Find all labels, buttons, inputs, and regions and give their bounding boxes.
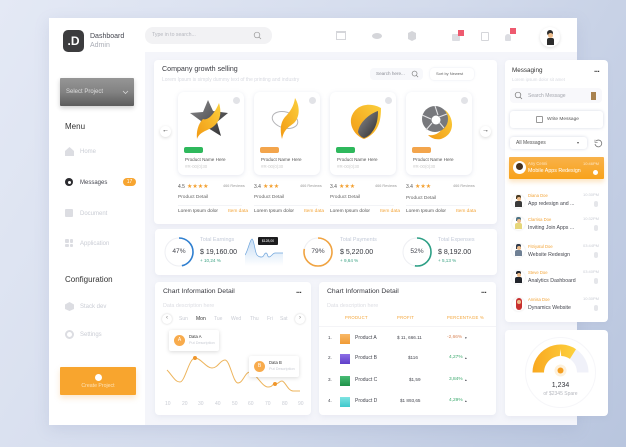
- product 4 details: Item data: [456, 209, 476, 214]
- panel: product table: [319, 282, 496, 415]
- callout: data A: Put Description: [189, 341, 215, 345]
- row D: 4,29%: [449, 398, 463, 403]
- message 5: 10:30PM: [583, 296, 599, 301]
- product 4 details: 466 Reviews: [453, 184, 475, 188]
- day selector: Thu: [250, 316, 259, 322]
- expenses donut: [402, 237, 432, 267]
- icon: shield with flame: [350, 104, 381, 139]
- select project button: Select Project: [66, 89, 103, 95]
- subheading: Data description here: [327, 303, 378, 309]
- menu item: home: [65, 147, 96, 156]
- product 2 details: ★★★: [263, 184, 279, 190]
- subheading: Data description here: [163, 303, 214, 309]
- message 3: Website Redesign: [528, 252, 570, 258]
- message 5: Annisa Doe: [528, 297, 550, 302]
- product card 1: Product Name Here: [185, 156, 226, 162]
- heading: Messaging: [512, 67, 542, 74]
- message 4: Analytics Dashboard: [528, 278, 576, 284]
- total expenses: [438, 237, 475, 263]
- logo: .D: [68, 34, 80, 48]
- axis labels: 70: [265, 401, 271, 407]
- user avatar: [540, 27, 560, 47]
- product 4 details: [406, 184, 476, 214]
- callout: data A: Data A: [189, 334, 202, 339]
- product 3 details: 3.4: [330, 184, 337, 190]
- message 4: 03:40PM: [583, 269, 599, 274]
- arrow left: ←: [162, 127, 169, 134]
- table header: PERCENTAGE %: [447, 315, 484, 320]
- message 2: Inviting Join Apps ...: [528, 224, 574, 230]
- write message button: [510, 111, 603, 128]
- earnings percent: 47%: [172, 248, 186, 255]
- message 3: 03:44PM: [583, 243, 599, 248]
- create project button: Create Project: [81, 383, 115, 389]
- product 4 details: Product Detail: [406, 196, 436, 201]
- total earnings: Total Earnings: [200, 237, 234, 243]
- row B: 4,27%: [449, 355, 463, 360]
- product 4 details: ★★★: [415, 184, 431, 190]
- callout: data B: B: [258, 363, 261, 369]
- table header: PRODUCT: [345, 315, 368, 320]
- subheading: Lorem ipsum dolor sit amet: [512, 77, 565, 82]
- heading: Company growth selling: [162, 65, 238, 73]
- row A: 1.: [328, 335, 332, 340]
- product card 4: #R-00(0)30: [413, 164, 435, 169]
- expenses percent: 52%: [410, 248, 424, 255]
- earnings tooltip: $128,00: [262, 239, 274, 243]
- message 3: [512, 243, 599, 258]
- product 4 details: Lorem Ipsum dolor: [406, 209, 446, 214]
- product 4 details: 3.4: [406, 184, 413, 190]
- logo: [63, 30, 84, 52]
- row C: ▴: [465, 378, 467, 382]
- total expenses: $ 8,192.00: [438, 248, 471, 256]
- product 2 details: Product Detail: [254, 195, 284, 200]
- day selector: Wed: [231, 316, 241, 322]
- row B: ▴: [465, 356, 467, 360]
- earnings tooltip: [258, 237, 278, 245]
- message 2: [512, 216, 599, 231]
- line chart: [166, 356, 300, 392]
- menu item: stack dev: Stack dev: [80, 304, 106, 310]
- panel: stats: [155, 229, 497, 275]
- sort by newest: [430, 68, 474, 80]
- day selector: Tue: [214, 316, 222, 322]
- product 3 details: ★★★: [339, 184, 355, 190]
- active message: [509, 157, 604, 179]
- icon: layers: [408, 31, 416, 41]
- brand text: [90, 32, 124, 49]
- search bar: [145, 27, 272, 44]
- total expenses: Total Expenses: [438, 237, 475, 243]
- axis labels: 20: [182, 401, 188, 407]
- message 5: [512, 296, 599, 312]
- axis labels: 10: [165, 401, 171, 407]
- total earnings: [200, 237, 237, 263]
- product 1 details: ★★★★: [187, 184, 209, 190]
- panel: messaging: [505, 60, 608, 322]
- gauge caption: of $2345 Spare: [543, 390, 578, 396]
- axis labels: [165, 401, 304, 407]
- product card 2: [254, 92, 320, 175]
- menu item: messages: Messages: [80, 180, 107, 186]
- product 2 details: Item data: [304, 209, 324, 214]
- active message: Mobile Apps Redesign: [528, 168, 581, 174]
- row C: [328, 376, 467, 386]
- menu heading: Menu: [65, 122, 85, 131]
- product 1 details: Lorem Ipsum dolor: [178, 209, 218, 214]
- product 1 details: 4.5: [178, 184, 185, 190]
- row B: 2.: [328, 355, 332, 360]
- earnings donut: [164, 237, 194, 266]
- menu dots: ...: [481, 286, 486, 295]
- table header: PROFIT: [397, 315, 414, 320]
- day selector: [161, 313, 306, 325]
- row D: $1 893,65: [400, 398, 420, 403]
- product 1 details: Item data: [228, 209, 248, 214]
- message 4: Steve Doe: [528, 270, 548, 275]
- subheading: Lorem Ipsum is simply dummy text of the printing and industry: [162, 77, 299, 83]
- menu dots: ...: [594, 65, 599, 74]
- row D: Product D: [355, 398, 377, 404]
- row A: ▾: [465, 336, 467, 340]
- day selector: Sun: [179, 316, 188, 322]
- total payments: Total Payments: [340, 237, 377, 243]
- select project button: [60, 78, 134, 106]
- search message: [510, 88, 602, 103]
- create project button: [60, 367, 136, 395]
- row C: 3,84%: [449, 377, 463, 382]
- callout: data A: [169, 330, 219, 351]
- message 4: [512, 269, 599, 284]
- top bar icons: [336, 28, 516, 41]
- product card 3: Product Name Here: [337, 156, 378, 162]
- product 2 details: Lorem Ipsum dolor: [254, 209, 294, 214]
- row C: 3.: [328, 377, 332, 382]
- menu item: application: Application: [80, 240, 109, 246]
- all messages dropdown: ▾: [577, 140, 579, 145]
- product 2 details: 466 Reviews: [300, 184, 322, 188]
- row B: [328, 354, 467, 364]
- menu item: messages: [65, 178, 136, 186]
- icon: feather with ring: [272, 98, 299, 139]
- message 2: Clarrisa Doe: [528, 217, 551, 222]
- search bar: Type in to search...: [152, 32, 196, 38]
- row B: Product B: [355, 355, 377, 361]
- message 2: 10:32PM: [583, 216, 599, 221]
- message 3: Fitriyatul Doe: [528, 244, 553, 249]
- callout: data B: [249, 356, 299, 377]
- search message: Search Message: [528, 92, 566, 98]
- axis labels: 40: [215, 401, 221, 407]
- active message: Any Cenni: [528, 161, 547, 166]
- day selector: ›: [299, 315, 301, 321]
- message 1: App redesign and ...: [528, 200, 574, 206]
- menu item: settings: Settings: [80, 332, 102, 338]
- configuration heading: Configuration: [65, 275, 113, 284]
- day selector: ‹: [166, 315, 168, 321]
- axis labels: 80: [282, 401, 288, 407]
- refresh icon: [594, 140, 602, 148]
- payments percent: 79%: [311, 248, 325, 255]
- total expenses: + 5,13 %: [438, 258, 456, 263]
- icon: camera aperture with flame: [422, 106, 452, 140]
- menu item: document: [65, 209, 108, 217]
- product 1 details: [178, 184, 248, 214]
- main dashboard panel: [49, 18, 577, 425]
- heading: Chart Information Detail: [163, 288, 235, 295]
- icon: disk: [372, 33, 382, 39]
- brand text: Dashboard: [90, 33, 124, 40]
- callout: data B: Data B: [269, 360, 282, 365]
- axis labels: 90: [298, 401, 304, 407]
- active message: 10:46PM: [583, 161, 599, 166]
- search here: [370, 68, 423, 80]
- row C: $1,59: [409, 377, 420, 382]
- menu item: home: Home: [80, 149, 96, 155]
- panel: company growth selling: [154, 60, 497, 224]
- arrow right: →: [482, 127, 489, 134]
- menu dots: ...: [296, 286, 301, 295]
- payments donut: [303, 237, 333, 267]
- icon: contact: [481, 32, 489, 41]
- product 1 details: Product Detail: [178, 195, 208, 200]
- panel: gauge: [505, 330, 608, 416]
- day selector: Mon: [196, 316, 206, 322]
- heading: Chart Information Detail: [327, 288, 399, 295]
- all messages dropdown: [510, 137, 587, 149]
- product card 4: [406, 92, 472, 175]
- row C: Product C: [355, 377, 377, 383]
- product card 1: [178, 92, 244, 175]
- product card 2: #R-00(0)30: [261, 164, 283, 169]
- product 3 details: [330, 184, 400, 214]
- row B: $116: [408, 355, 418, 360]
- arrow left: [160, 126, 171, 137]
- product 3 details: Item data: [380, 209, 400, 214]
- sort by newest: Sort by Newest: [436, 71, 463, 76]
- panel: line chart: [155, 282, 311, 415]
- product 3 details: Product Detail: [330, 195, 360, 200]
- total payments: [340, 237, 377, 263]
- row A: -2,66%: [447, 335, 462, 340]
- write message button: Write Message: [547, 116, 579, 122]
- row A: $ 11, 666.11: [397, 335, 422, 340]
- product card 3: [330, 92, 396, 175]
- menu item: document: Document: [80, 210, 107, 216]
- product 3 details: Lorem Ipsum dolor: [330, 209, 370, 214]
- product 1 details: 466 Reviews: [223, 184, 245, 188]
- product card 1: #R-00(0)30: [185, 164, 207, 169]
- arrow right: [480, 126, 491, 137]
- all messages dropdown: All Messages: [516, 140, 546, 146]
- menu item: messages: 17: [127, 179, 132, 185]
- menu item: settings: [65, 330, 102, 339]
- product card 3: #R-00(0)30: [337, 164, 359, 169]
- total payments: $ 5,220.00: [340, 248, 373, 256]
- row D: [328, 397, 467, 407]
- product card 4: Product Name Here: [413, 156, 454, 162]
- gauge chart: [525, 337, 596, 408]
- earnings sparkline: [245, 238, 283, 262]
- menu item: stack dev: [65, 302, 106, 311]
- icon: mail with badge: [452, 30, 464, 41]
- total payments: + 9,64 %: [340, 258, 358, 263]
- icon: bell with badge: [505, 28, 516, 41]
- message 1: [512, 192, 599, 208]
- product 2 details: 3.4: [254, 184, 261, 190]
- day selector: Sat: [280, 316, 288, 322]
- content area background: [145, 52, 577, 425]
- search here: Search here...: [376, 71, 405, 76]
- axis labels: 30: [198, 401, 204, 407]
- row A: Product A: [355, 335, 377, 341]
- product 2 details: [254, 184, 324, 214]
- icon: star with flame: [190, 100, 228, 139]
- message 1: Diana Doe: [528, 193, 548, 198]
- message 1: 10:30PM: [583, 192, 599, 197]
- message 5: Dynamics Website: [528, 304, 571, 310]
- product 3 details: 466 Reviews: [375, 184, 397, 188]
- brand text: Admin: [90, 42, 110, 49]
- table header: [319, 316, 496, 327]
- row A: [328, 334, 467, 344]
- axis labels: 50: [232, 401, 238, 407]
- icon: window: [336, 31, 346, 40]
- row D: ▴: [465, 399, 467, 403]
- total earnings: + 10,24 %: [200, 258, 221, 263]
- total earnings: $ 19,160.00: [200, 248, 237, 256]
- row D: 4.: [328, 398, 332, 403]
- day selector: Fri: [267, 316, 273, 322]
- callout: data B: Put Description: [269, 367, 295, 371]
- axis labels: 60: [248, 401, 254, 407]
- gauge value: 1,234: [552, 382, 569, 388]
- callout: data A: A: [178, 337, 181, 343]
- product card 2: Product Name Here: [261, 156, 302, 162]
